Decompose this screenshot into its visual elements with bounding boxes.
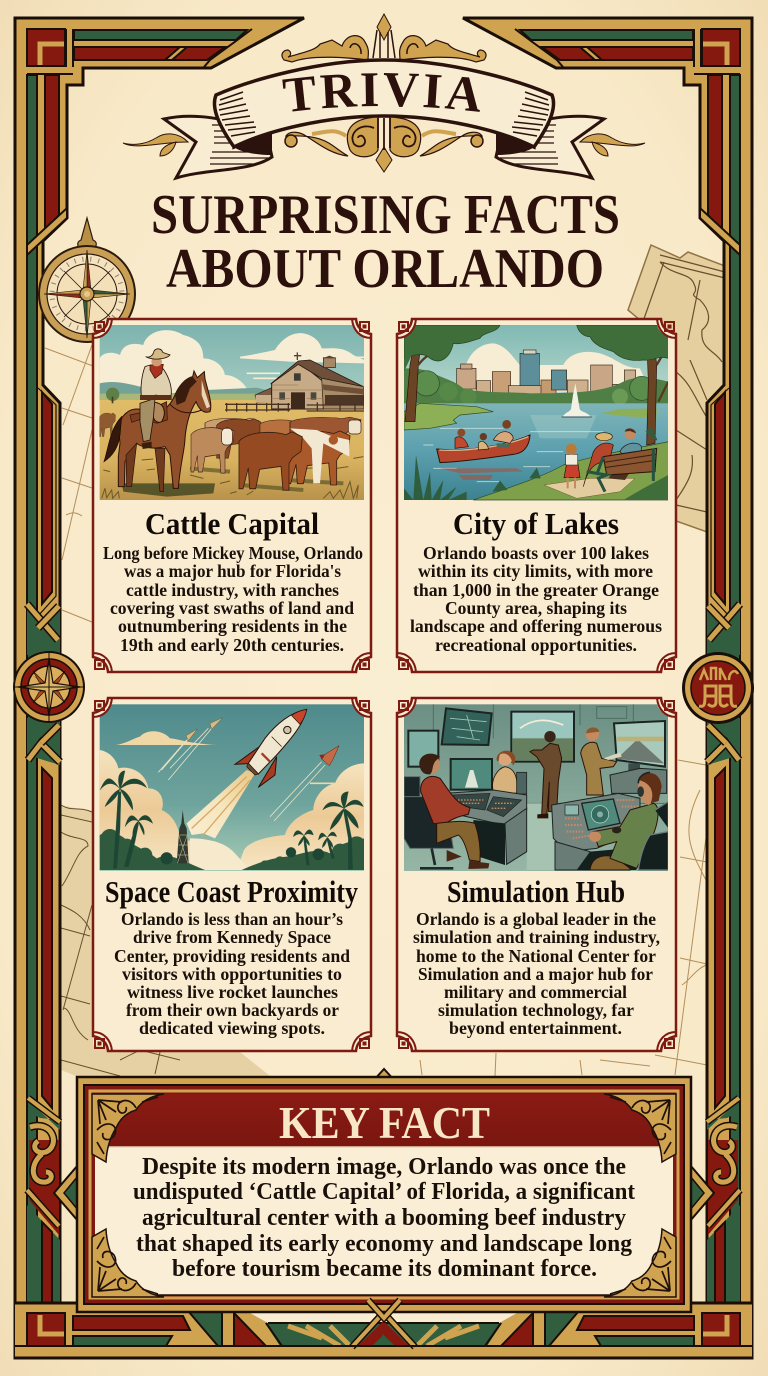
small rockets xyxy=(168,728,212,780)
card text: than 1,000 in the greater Orange xyxy=(413,580,659,600)
card text: recreational opportunities. xyxy=(435,635,637,655)
corner ornaments xyxy=(92,1094,676,1297)
corner ornaments xyxy=(93,698,371,1051)
panel: Cattle Capital xyxy=(93,319,371,672)
reeds xyxy=(404,455,467,500)
child xyxy=(564,460,580,478)
cow front xyxy=(239,432,302,490)
panel: City of Lakes xyxy=(397,319,676,672)
card text: was a major hub for Florida's xyxy=(124,561,341,581)
card heading: Cattle Capital xyxy=(145,506,319,541)
card text: Orlando is less than an hour’s xyxy=(121,909,343,929)
card text xyxy=(103,543,363,655)
icon: right crest medallion xyxy=(682,652,754,724)
corner ornaments xyxy=(93,319,371,672)
standing man in tan xyxy=(581,742,617,795)
border frame: right half xyxy=(382,18,752,1358)
heading: Key Fact: KEY FACT xyxy=(279,1097,490,1148)
card text: Long before Mickey Mouse, Orlando xyxy=(103,543,363,563)
card text: beyond entertainment. xyxy=(449,1018,622,1038)
banner ornament: top flourish xyxy=(282,14,486,62)
vintage map: right sheet xyxy=(628,245,725,532)
panel: key fact xyxy=(54,1069,714,1318)
banner ornament: bottom flourish xyxy=(285,117,483,172)
main title: SURPRISING FACTS xyxy=(151,184,620,246)
card text: cattle industry, with ranches xyxy=(126,580,339,600)
card text xyxy=(410,543,662,655)
icon: left compass medallion xyxy=(13,651,85,723)
card text: 19th and early 20th centuries. xyxy=(120,635,344,655)
map grid lines xyxy=(45,345,707,1076)
card text: witness live rocket launches xyxy=(127,982,338,1002)
near bank xyxy=(473,442,668,500)
card heading: Simulation Hub xyxy=(447,874,625,909)
illustration: cowboy and cattle at a ranch xyxy=(100,325,365,500)
palms xyxy=(100,771,363,869)
trees xyxy=(404,354,420,422)
key fact text xyxy=(133,1154,635,1282)
banner ribbon main with title xyxy=(212,58,556,150)
wall screens xyxy=(408,708,665,790)
seated woman xyxy=(493,767,517,793)
saddle and rider xyxy=(130,402,167,423)
card text xyxy=(413,909,660,1038)
family on bench xyxy=(583,443,613,487)
key fact text: agricultural center with a booming beef industry xyxy=(142,1205,626,1231)
cow right white xyxy=(287,431,350,485)
bottom clasp xyxy=(368,1300,400,1318)
card text: Orlando is a global leader in the xyxy=(416,909,656,929)
main title: ABOUT ORLANDO xyxy=(166,238,604,300)
card text: landscape and offering numerous xyxy=(410,616,662,636)
card text: from their own backyards or xyxy=(126,1000,339,1020)
ground xyxy=(100,833,205,870)
exhaust plume xyxy=(187,770,255,838)
left console xyxy=(445,790,527,825)
main title xyxy=(151,184,620,300)
vintage map: left sheet xyxy=(61,805,270,1076)
boat xyxy=(440,468,523,480)
key fact text: that shaped its early economy and landscape long xyxy=(136,1231,632,1257)
card text: within its city limits, with more xyxy=(418,561,653,581)
card text: simulation technology, far xyxy=(438,1000,634,1020)
card text: County area, shaping its xyxy=(445,598,627,618)
standing man in brown xyxy=(530,743,562,817)
card heading: Space Coast Proximity xyxy=(105,874,358,909)
card text: Center, providing residents and xyxy=(114,946,350,966)
fountain xyxy=(563,383,591,417)
illustration: lake, rowing boat and skyline xyxy=(404,325,669,500)
panel: Space Coast Proximity xyxy=(93,698,371,1051)
card text xyxy=(114,909,350,1038)
right operator xyxy=(590,856,630,870)
heading: Trivia: TRIVIA xyxy=(282,73,480,112)
card text: military and commercial xyxy=(444,982,627,1002)
tower xyxy=(177,810,189,863)
left operator xyxy=(404,777,453,848)
fence xyxy=(225,402,364,412)
card heading: City of Lakes xyxy=(453,506,619,541)
cow left xyxy=(191,427,234,473)
key fact text: before tourism became its dominant force. xyxy=(172,1256,597,1282)
banner ornament: side leaves xyxy=(123,134,645,156)
icon: brass compass rose xyxy=(38,218,136,343)
card text: dedicated viewing spots. xyxy=(139,1018,325,1038)
main rocket xyxy=(235,745,262,764)
banner ribbon tails xyxy=(164,116,604,178)
illustration: rocket launch over palms xyxy=(100,704,365,871)
card text: Simulation and a major hub for xyxy=(418,964,653,984)
card text: Orlando boasts over 100 lakes xyxy=(423,543,649,563)
text plate xyxy=(95,1147,673,1295)
card text: home to the National Center for xyxy=(416,946,656,966)
key fact text: undisputed ‘Cattle Capital’ of Florida, a significant xyxy=(133,1179,635,1205)
panel: Simulation Hub xyxy=(397,698,676,1051)
side diamonds xyxy=(54,1069,714,1221)
card text: covering vast swaths of land and xyxy=(110,598,354,618)
key fact text: Despite its modern image, Orlando was once the xyxy=(142,1154,626,1180)
header band xyxy=(92,1094,676,1147)
corner ornaments xyxy=(397,698,676,1051)
corner ornaments xyxy=(397,319,676,672)
right console xyxy=(552,793,640,852)
card text: visitors with opportunities to xyxy=(122,964,342,984)
border frame: left half xyxy=(15,18,384,1358)
card text: simulation and training industry, xyxy=(413,927,660,947)
illustration: simulation control room xyxy=(404,704,669,871)
card text: outnumbering residents in the xyxy=(118,616,347,636)
grass xyxy=(190,468,343,490)
barn xyxy=(254,388,272,403)
card text: drive from Kennedy Space xyxy=(133,927,331,947)
back cows xyxy=(204,418,260,428)
horse xyxy=(118,371,211,488)
